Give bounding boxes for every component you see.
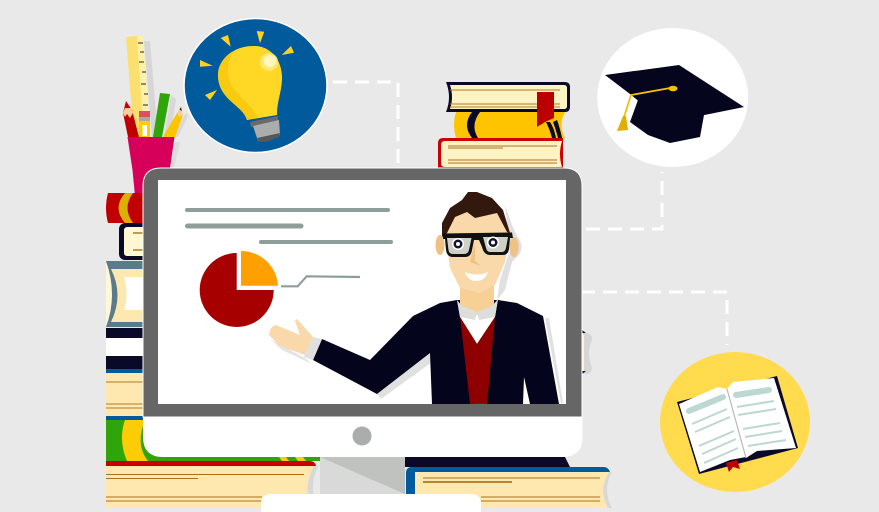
book: large cream bottom book [106, 461, 316, 466]
dashed connector: open book to monitor [581, 292, 727, 345]
cuff [304, 337, 322, 360]
monitor stand [320, 457, 405, 496]
icon: book stack at top centre [438, 82, 570, 168]
neck [460, 285, 494, 320]
monitor [143, 168, 582, 457]
mouth [465, 272, 488, 281]
pie chart [200, 251, 278, 327]
ears [436, 235, 444, 255]
panel: screen [158, 180, 566, 404]
hand [269, 319, 313, 355]
shadows [377, 353, 432, 399]
jacket [313, 300, 559, 404]
icon: book stack at left [106, 193, 320, 508]
icon: light bulb circle [184, 18, 327, 152]
glasses [443, 232, 513, 257]
right bottom book [405, 457, 612, 508]
book: slate cover [106, 261, 112, 327]
book: green spine [106, 420, 320, 461]
vest [460, 317, 495, 404]
book: navy stripes [106, 328, 146, 338]
pie chart leader line [281, 276, 360, 286]
book: red spine [106, 193, 145, 223]
teacher figure [269, 192, 563, 404]
icon: book peeking behind monitor [582, 330, 592, 374]
dashed connector: graduation cap to monitor [586, 172, 662, 229]
icon: open book circle [660, 352, 810, 492]
text placeholder lines [187, 210, 391, 242]
monitor base [261, 494, 481, 512]
power button [352, 426, 372, 446]
jacket sliver [523, 377, 530, 404]
icon: graduation cap circle [597, 28, 748, 167]
hair [442, 192, 510, 237]
book: dark cover [119, 223, 149, 260]
nose [470, 243, 481, 266]
bookmark ribbon [726, 460, 740, 472]
bookmark [537, 92, 554, 127]
dashed connector: bulb to monitor [333, 82, 398, 166]
face [445, 205, 511, 293]
shirt [457, 299, 498, 344]
icon: pencil cup [123, 36, 188, 196]
